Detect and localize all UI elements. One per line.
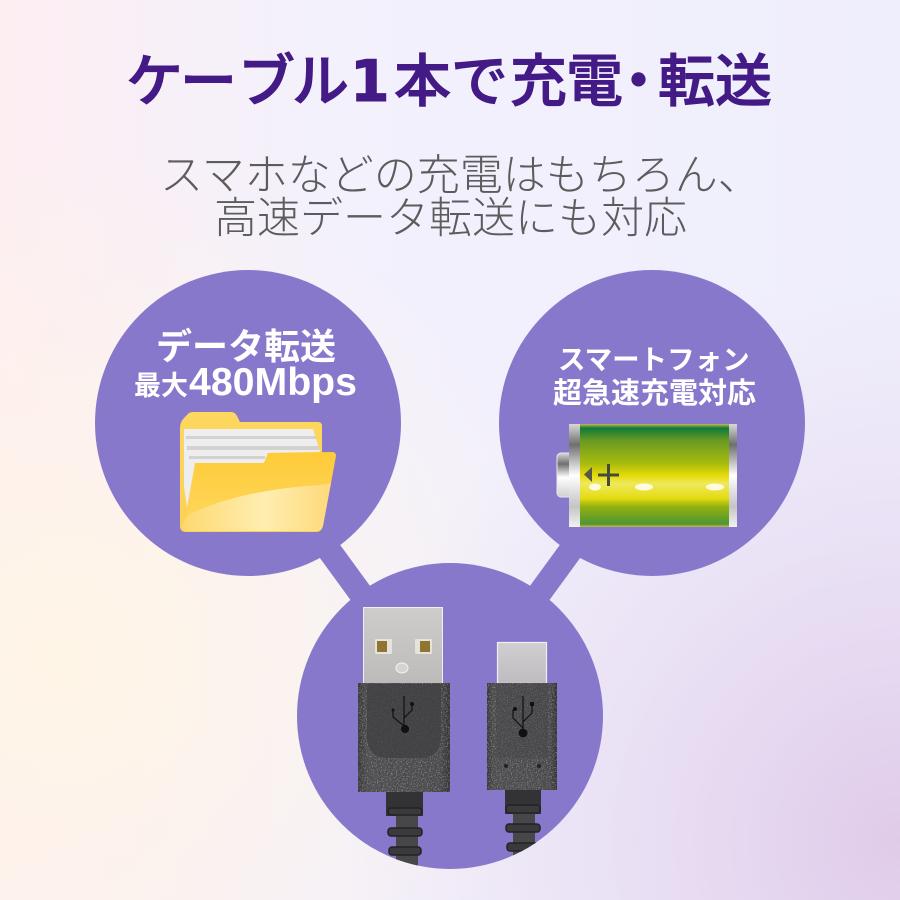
subtitle: スマホなどの充電はもちろん、 — [160, 152, 761, 200]
connector circle — [297, 563, 603, 869]
subtitle — [160, 152, 761, 243]
icon: USB symbol — [513, 696, 534, 737]
icon: USB symbol — [392, 696, 414, 732]
subtitle: 高速データ転送にも対応 — [214, 195, 687, 243]
USB-A connector — [358, 608, 450, 871]
data transfer speed: 480Mbps — [189, 361, 357, 404]
USB-C connector — [487, 642, 557, 866]
panel: smartphone charging — [499, 270, 805, 576]
data transfer circle — [95, 270, 401, 576]
panel: cable connectors — [297, 563, 603, 871]
charging subheading: 超急速充電対応 — [553, 377, 756, 410]
title: 1 — [350, 49, 390, 115]
charging circle — [499, 270, 805, 576]
title: 本で充電・転送 — [394, 50, 772, 114]
icon: folder — [180, 412, 336, 532]
data transfer speed: 最大 — [134, 371, 188, 401]
charging heading: スマートフォン — [558, 344, 750, 375]
connector lines between circles — [310, 524, 590, 620]
title: ケーブル — [126, 50, 349, 114]
icon: battery — [557, 424, 737, 527]
panel: data transfer — [95, 270, 401, 576]
data transfer heading: データ転送 — [156, 326, 336, 367]
